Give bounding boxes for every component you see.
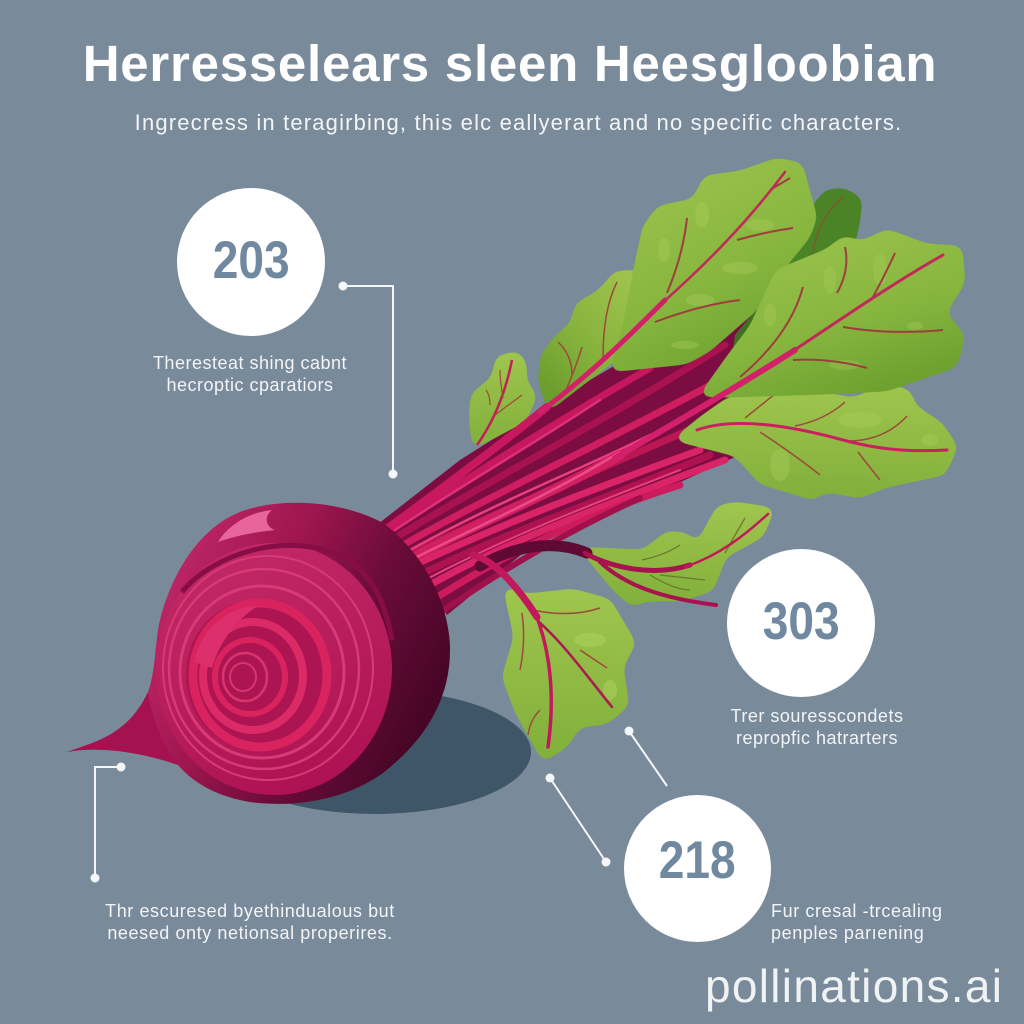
stat circle 303: 303 [763,592,839,651]
text block 3: Thr escuresed byethindualous but [105,901,395,921]
shadow [219,690,531,814]
stat circle 203 [177,188,325,336]
highlight [218,510,275,542]
text block 1: hecroptic cparatiors [166,374,334,394]
text block 4: Fur cresal -trcealing [771,901,943,921]
stat circle 218: 218 [659,831,736,890]
back leaf dark [785,188,862,285]
cut face with rings [156,543,392,795]
text block 2: repropfic hatrarters [736,728,898,748]
beetroot body [67,503,450,804]
watermark: pollinations.ai [705,960,1003,1012]
stat circle 203: 203 [213,231,289,290]
leaf: top [610,158,817,372]
leaf: lower right small [578,502,775,607]
stat circle 218 [624,795,771,942]
text block 2 [730,706,903,748]
connector lines [90,282,667,882]
text block 1 [153,353,347,395]
stat circle 303 [727,549,875,697]
leaf midrib stems [388,172,947,565]
stem bundle [378,310,780,615]
tail shading [67,692,178,765]
subtitle: Ingrecress in teragirbing, this elc eallyerart and no specific characters. [135,110,902,135]
leaf: small left [469,351,537,449]
leaf: lower center [502,586,636,762]
text block 4: penples parıening [771,923,924,943]
stems to lower leaves [473,514,768,747]
text block 1: Theresteat shing cabnt [153,353,347,373]
leaf: right [698,229,965,397]
text block 3: neesed onty netionsal properires. [107,923,393,943]
text block 4 [771,901,943,943]
shaded gap between leaves [730,268,825,372]
title: Herresselears sleen Heesgloobian [83,35,937,92]
leaf: upper left [538,270,642,412]
text block 2: Trer souresscondets [731,706,903,726]
leaf: lower right [672,384,958,500]
text block 3 [105,901,395,943]
